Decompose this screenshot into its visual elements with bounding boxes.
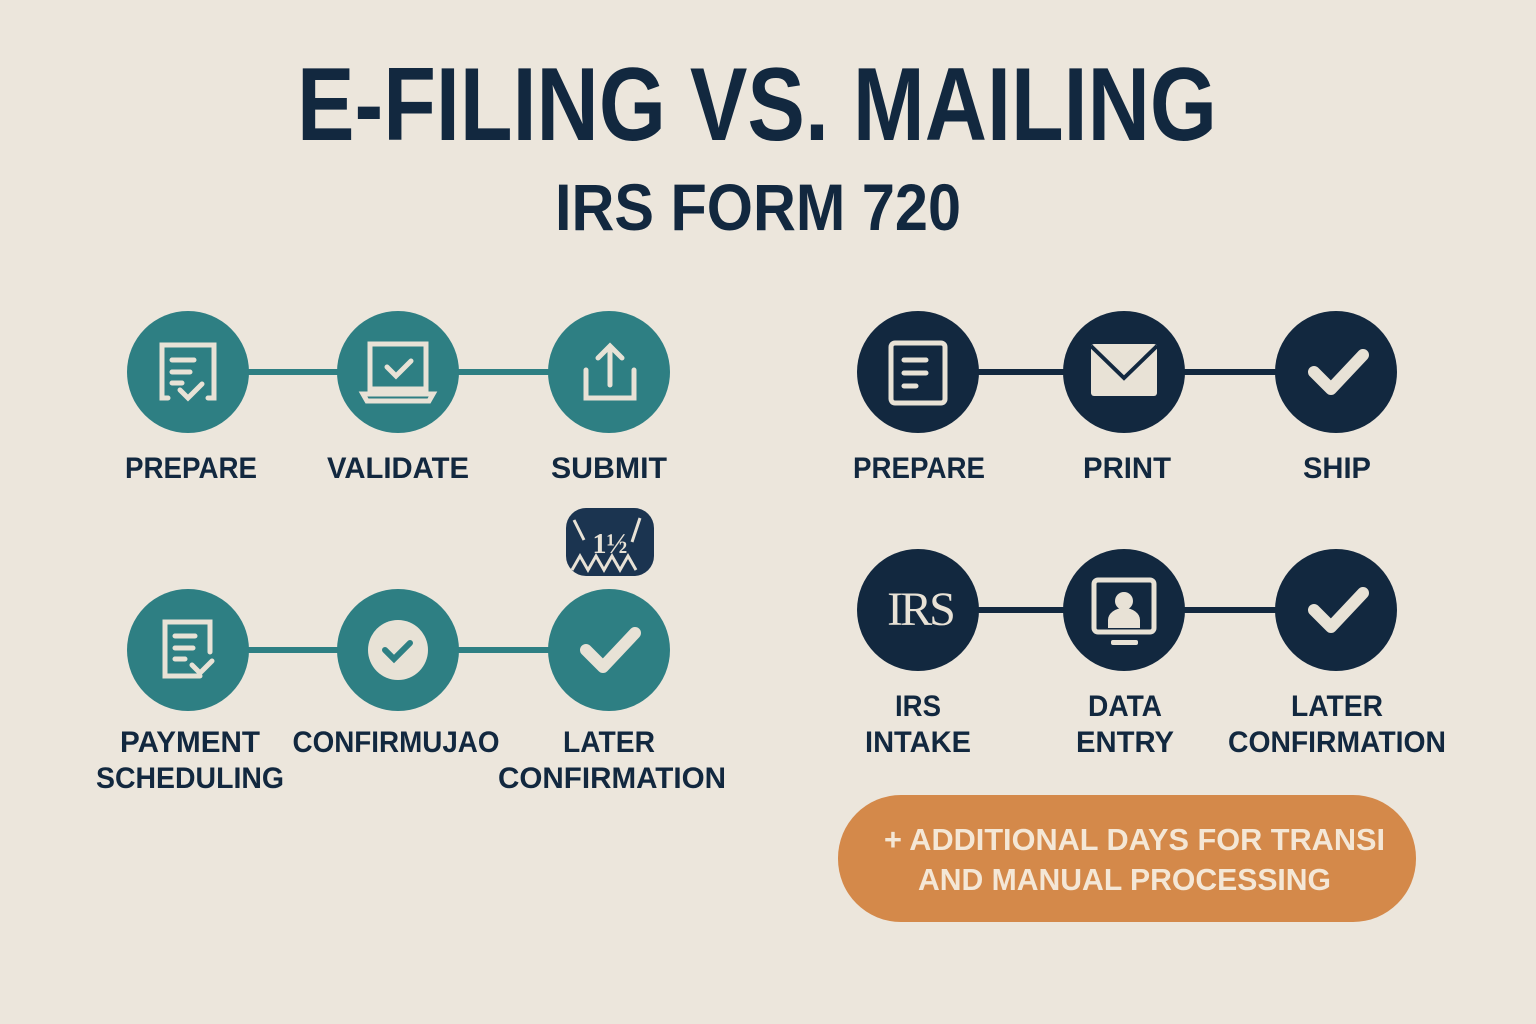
- icon: irs seal: [566, 508, 654, 576]
- labels: mailing row 2: [865, 690, 1446, 759]
- labels: row 2: CONFIRMUJAO: [292, 726, 500, 759]
- connector lines: mailing: [918, 372, 1336, 610]
- icon: confirmation: [337, 589, 459, 711]
- labels: mailing row 2: ENTRY: [1076, 726, 1174, 759]
- labels: row 2: LATER: [563, 726, 655, 759]
- labels: mailing row 1: SHIP: [1303, 452, 1371, 485]
- labels: mailing row 2: LATER: [1291, 690, 1383, 723]
- title: E-FILING VS. MAILING: [297, 47, 1217, 163]
- labels: mailing row 1: [853, 452, 1371, 485]
- callout: additional days: AND MANUAL PROCESSING: [918, 862, 1331, 897]
- panel: e-filing process: [96, 311, 726, 795]
- connector lines: e-filing: [188, 372, 609, 650]
- icon: prepare paper: [857, 311, 979, 433]
- labels: mailing row 2: CONFIRMATION: [1228, 726, 1446, 759]
- icon: submit upload: [548, 311, 670, 433]
- icon: later confirmation check: [1275, 549, 1397, 671]
- icon: irs seal: 1½: [592, 529, 628, 560]
- labels: row 2: CONFIRMATION: [498, 762, 726, 795]
- icon: later confirmation: [548, 589, 670, 711]
- labels: mailing row 1: PREPARE: [853, 452, 985, 485]
- subtitle: IRS FORM 720: [555, 170, 961, 244]
- labels: mailing row 1: PRINT: [1083, 452, 1171, 485]
- icon: validate laptop: [337, 311, 459, 433]
- labels: row 1: PREPARE: [125, 452, 257, 485]
- labels: row 1: VALIDATE: [327, 452, 469, 485]
- labels: row 2: SCHEDULING: [96, 762, 284, 795]
- panel: mailing process: [838, 311, 1446, 922]
- callout: additional days: [838, 795, 1416, 922]
- icon: irs intake: [857, 549, 979, 671]
- icon: ship check: [1275, 311, 1397, 433]
- icon: prepare document: [127, 311, 249, 433]
- labels: mailing row 2: DATA: [1088, 690, 1162, 723]
- labels: row 2: [96, 726, 726, 795]
- labels: row 1: [125, 452, 667, 485]
- icon: irs intake: IRS: [887, 583, 953, 636]
- labels: row 2: PAYMENT: [120, 726, 260, 759]
- labels: mailing row 2: INTAKE: [865, 726, 971, 759]
- icon: print envelope: [1063, 311, 1185, 433]
- labels: mailing row 2: IRS: [895, 690, 941, 723]
- labels: row 1: SUBMIT: [551, 452, 667, 485]
- icon: payment scheduling: [127, 589, 249, 711]
- icon: data entry: [1063, 549, 1185, 671]
- callout: additional days: + ADDITIONAL DAYS FOR TRANSI: [884, 822, 1385, 857]
